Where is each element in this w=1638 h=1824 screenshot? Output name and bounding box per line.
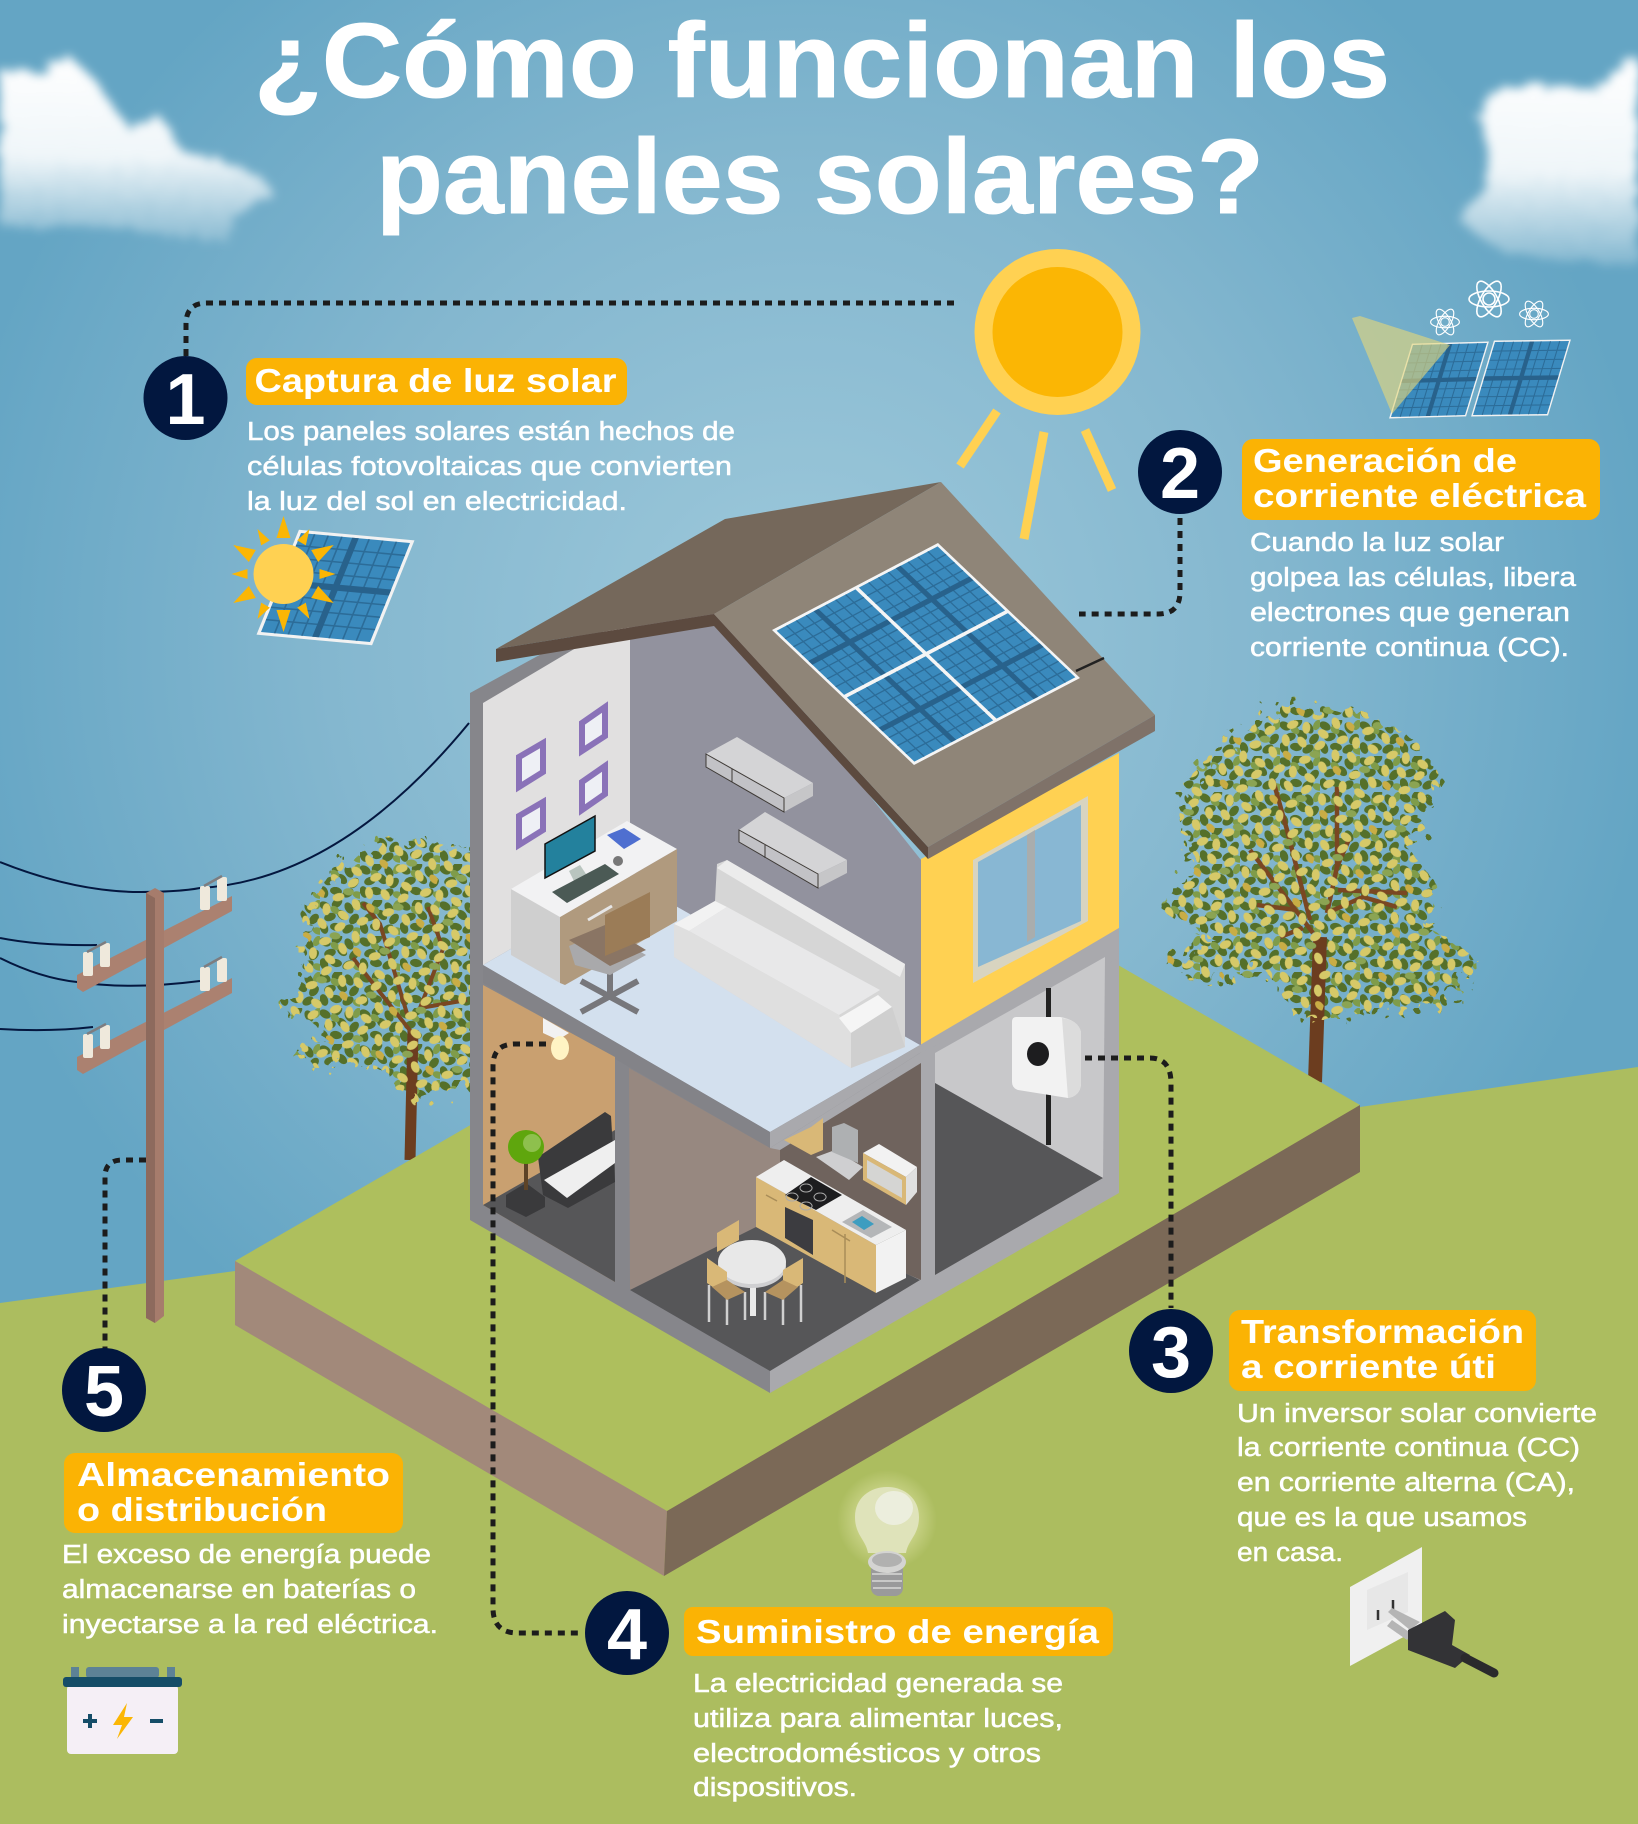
- step 2 heading: Generación de: [1253, 442, 1517, 479]
- step 3 plug icon: [1350, 1547, 1494, 1673]
- lower right room: [935, 957, 1105, 1275]
- step 3 heading: [1229, 1310, 1536, 1391]
- sun: [960, 249, 1140, 539]
- floating shelf lower: [739, 812, 847, 888]
- leader line 4: [493, 1044, 582, 1633]
- step 3 heading: Transformación: [1241, 1313, 1524, 1350]
- kitchen counter: [756, 1160, 906, 1293]
- dark sofa: [538, 1112, 615, 1208]
- step 3 badge: [1129, 1309, 1213, 1393]
- step 3 text: que es la que usamos: [1237, 1504, 1527, 1532]
- step 2 heading: corriente eléctrica: [1253, 477, 1587, 514]
- window: [973, 796, 1088, 983]
- step 2: [1138, 430, 1600, 662]
- step 1 heading: Captura de luz solar: [254, 362, 617, 399]
- step 4 text: [693, 1670, 1063, 1802]
- lower middle room: [629, 1063, 921, 1371]
- power lines: [0, 723, 469, 1030]
- land block: [235, 858, 1360, 1576]
- dining set: [707, 1220, 803, 1325]
- step 3 text: en casa.: [1237, 1539, 1343, 1567]
- upper left white wall: [483, 610, 640, 965]
- leader line 2: [1079, 518, 1180, 614]
- ground background: [0, 1067, 1638, 1824]
- step 4 badge: 4: [607, 1595, 647, 1675]
- step 3: [1129, 1309, 1597, 1567]
- step 5 badge: [62, 1348, 146, 1432]
- step 3 badge: 3: [1151, 1313, 1191, 1393]
- step 3 text: Un inversor solar convierte: [1237, 1400, 1597, 1428]
- upper floor: [483, 880, 920, 1132]
- leader line 3: [1085, 1058, 1171, 1308]
- step 3 heading: a corriente úti: [1241, 1348, 1496, 1385]
- step 5 battery icon: [63, 1667, 182, 1754]
- step 1: [144, 356, 735, 516]
- step 2 badge: [1138, 430, 1222, 514]
- house shell: [470, 600, 1119, 1393]
- step 4 light bulb icon: [837, 1470, 937, 1596]
- white sofa: [674, 860, 905, 1068]
- step 5 badge: 5: [84, 1352, 124, 1432]
- step 2 text: corriente continua (CC).: [1250, 634, 1569, 662]
- inverter: [1012, 988, 1081, 1145]
- step 1 badge: 1: [165, 360, 206, 440]
- step 4 text: dispositivos.: [693, 1774, 857, 1802]
- step 5 text: El exceso de energía puede: [62, 1541, 431, 1569]
- step 4 text: utiliza para alimentar luces,: [693, 1705, 1063, 1733]
- step 2 text: [1250, 529, 1577, 662]
- cloud left: [0, 55, 272, 240]
- house: [470, 482, 1155, 1393]
- step 4: [585, 1591, 1113, 1802]
- step 1 text: Los paneles solares están hechos de: [247, 418, 735, 446]
- potted plant: [506, 1130, 545, 1217]
- kitchen hood: [816, 1123, 863, 1180]
- step 2 badge: 2: [1160, 434, 1200, 514]
- utility pole: [77, 876, 232, 1323]
- step 1 text: células fotovoltaicas que convierten: [247, 453, 732, 481]
- cloud right: [1455, 58, 1638, 264]
- step 4 text: La electricidad generada se: [693, 1670, 1063, 1698]
- step 1 heading: [246, 358, 627, 405]
- step 5: [62, 1348, 438, 1639]
- roof: [496, 482, 1155, 859]
- roof solar panels: [772, 543, 1104, 765]
- bedroom lamp: [543, 1018, 569, 1060]
- step 5 text: [62, 1541, 438, 1639]
- desk: [511, 816, 677, 985]
- step 5 heading: [64, 1453, 403, 1533]
- step 2 text: golpea las células, libera: [1250, 564, 1577, 592]
- step 2 panels and atoms icon: [1352, 278, 1571, 418]
- floating shelf upper: [706, 737, 813, 812]
- kitchen wall cabinet: [863, 1144, 917, 1205]
- lower left room: [483, 985, 615, 1282]
- tree left: [278, 836, 470, 1160]
- kitchen upper cabinet left: [784, 1118, 823, 1155]
- step 4 text: electrodomésticos y otros: [693, 1740, 1041, 1768]
- leader line 5: [105, 1160, 146, 1350]
- tree right: [1161, 696, 1479, 1082]
- step 5 heading: Almacenamiento: [77, 1456, 390, 1493]
- leader line 1: [186, 303, 954, 357]
- step 4 heading: Suministro de energía: [696, 1613, 1100, 1650]
- step 1 text: la luz del sol en electricidad.: [247, 488, 627, 516]
- step 1 sun and panel icon: [230, 516, 414, 645]
- step 1 text: [247, 418, 735, 516]
- step 2 text: electrones que generan: [1250, 599, 1570, 627]
- step 3 text: en corriente alterna (CA),: [1237, 1469, 1575, 1497]
- step 4 heading: [684, 1607, 1113, 1656]
- title: paneles solares?: [376, 118, 1264, 236]
- yellow outer wall: [921, 753, 1119, 1045]
- step 3 text: [1237, 1400, 1597, 1567]
- upper back wall: [630, 600, 921, 1050]
- title: [254, 2, 1390, 236]
- title: ¿Cómo funcionan los: [254, 2, 1390, 120]
- step 5 text: inyectarse a la red eléctrica.: [62, 1611, 438, 1639]
- step 5 heading: o distribución: [77, 1491, 327, 1528]
- step 2 text: Cuando la luz solar: [1250, 529, 1505, 557]
- step 2 heading: [1242, 439, 1600, 520]
- step 1 badge: [144, 356, 228, 440]
- step 4 badge: [585, 1591, 669, 1675]
- step 5 text: almacenarse en baterías o: [62, 1576, 416, 1604]
- picture frames: [519, 707, 605, 845]
- office chair: [569, 892, 650, 1012]
- step 3 text: la corriente continua (CC): [1237, 1434, 1580, 1462]
- floor slab edge: [483, 928, 1119, 1148]
